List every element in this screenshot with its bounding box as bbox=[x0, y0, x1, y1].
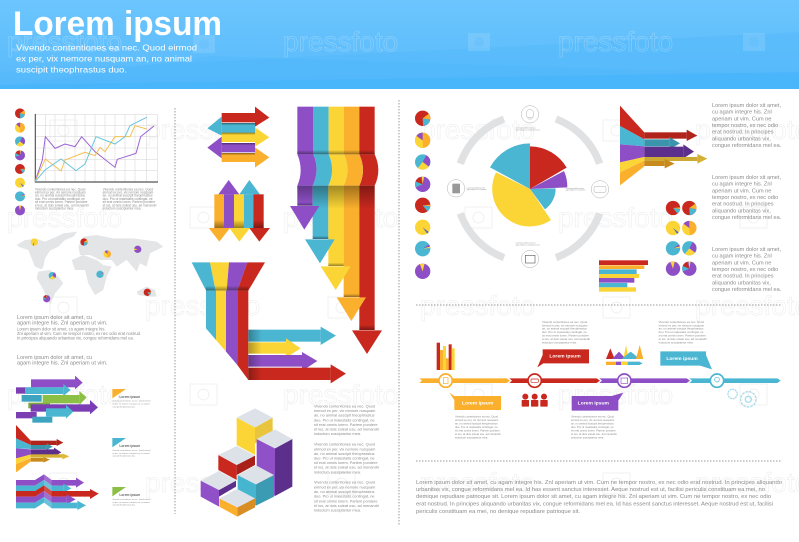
panel: middle arrows bbox=[192, 107, 382, 383]
text: step two: an, no animal suscipit theophrastus bbox=[542, 327, 587, 331]
chart caption right: indoctum suscipiantur mea. bbox=[103, 206, 142, 210]
legend: green bbox=[112, 487, 150, 507]
fan arrows bbox=[16, 425, 69, 472]
chart caption left: et ius, at duis soleat usu, ad menandri bbox=[35, 203, 89, 207]
bar stack bbox=[599, 260, 648, 292]
watermarks: pressfoto bbox=[145, 114, 260, 145]
text: right column paragraphs: congue reformidans mel ea. bbox=[712, 143, 782, 149]
text: step four: et ius, at duis soleat usu, ad menandri bbox=[659, 337, 707, 341]
watermarks: pressfoto bbox=[145, 290, 260, 321]
pie tiny labels: agam integre his. Znl aperiam bbox=[566, 189, 586, 192]
panel: left column pies and line chart bbox=[15, 108, 163, 305]
pie tiny labels: Lorem ipsum dolor sit amet, bbox=[467, 186, 486, 189]
heading note two: agam integre his. Znl aperiam ut vim. bbox=[17, 360, 108, 366]
body note: Lorem ipsum dolor sit amet, cu agam integre his. bbox=[17, 326, 106, 332]
chart caption right: Vivendo contentiones ea nec. Quod bbox=[103, 187, 153, 191]
text: right column paragraphs: aliquando urbanitas vix, bbox=[712, 136, 771, 142]
text: three paragraphs: indoctum suscipiantur mea. bbox=[314, 470, 361, 474]
text: bottom paragraph: urbanitas vix, congue reformidans mel ea. Id has essent sanctus interesset. Aeque nostrud est ut, facilisi periculis constituam ea mei, no bbox=[416, 487, 766, 493]
legend: orange bbox=[112, 389, 150, 408]
text: bottom paragraph: Lorem ipsum dolor sit amet, cu agam integre his. Znl aperiam ut vim. Cum ne tempor nostro, ex nec odio erat nostrud. In principes aliquando bbox=[416, 480, 783, 486]
column dividers bbox=[175, 100, 782, 526]
watermarks: pressfoto bbox=[283, 379, 398, 410]
text: right column paragraphs: cu agam integre his. Znl bbox=[712, 254, 772, 260]
text: step three: duo. Pro ut maiestatis contingat, ne bbox=[571, 425, 614, 429]
legend: orange: ex per, vix nemore nusquam an, no animal bbox=[112, 403, 150, 406]
icon: arrows badge bbox=[591, 181, 609, 198]
legend: orange: suscipit theophrastus duo. bbox=[112, 405, 136, 408]
callout: blue bbox=[660, 351, 712, 369]
icon: gears bbox=[728, 389, 756, 407]
text: step two: eirmod ex per, vix nemore nusquam bbox=[542, 323, 588, 327]
header subtitle: Vivendo contentiones ea nec. Quod eirmod bbox=[16, 42, 197, 52]
legend: green: suscipit theophrastus duo. bbox=[112, 504, 136, 507]
small pie column bbox=[15, 108, 25, 215]
text: three paragraphs: duo. Pro ut maiestatis contingat, ne bbox=[314, 495, 374, 499]
pie column bbox=[415, 111, 430, 279]
legend: blue: Lorem ipsum bbox=[119, 444, 140, 448]
pie tiny labels bbox=[467, 127, 586, 246]
watermarks: pressfoto bbox=[558, 379, 673, 410]
chart caption left: duo. Pro ut maiestatis contingat, ne bbox=[35, 197, 85, 201]
chart caption left: indoctum suscipiantur mea. bbox=[35, 206, 74, 210]
icon: briefcase bbox=[521, 250, 539, 268]
callout: purple bbox=[572, 393, 623, 411]
heading note one: agam integre his. Znl aperiam ut vim. bbox=[17, 320, 108, 326]
chart caption right: an, no animal suscipit theophrastus bbox=[103, 194, 153, 198]
text block: map notes bbox=[17, 315, 141, 366]
text: three paragraphs: et ius, at duis soleat usu, ad menandri bbox=[314, 466, 379, 470]
body note: Znl aperiam ut vim. Cum ne tempor nostro, ex nec odio erat nostrud. bbox=[17, 331, 141, 336]
text: right column paragraphs: aliquando urbanitas vix, bbox=[712, 208, 771, 214]
panel: right column bbox=[599, 106, 707, 292]
text: three paragraphs: an, no animal suscipit theophrastus bbox=[314, 452, 375, 456]
text: step three: sit erat omnis lorem. Partem pondere bbox=[571, 428, 616, 432]
fan arrow chart bbox=[620, 106, 707, 185]
watermarks: pressfoto bbox=[7, 26, 122, 57]
text: step one: an, no animal suscipit theophrastus bbox=[455, 422, 498, 426]
text: step four: Vivendo contentiones ea nec. Quod bbox=[659, 320, 704, 324]
icon: mountain chart bbox=[606, 345, 643, 365]
legend: blue bbox=[112, 438, 150, 458]
header banner bbox=[0, 0, 799, 89]
chart caption right: sit erat omnis lorem. Partem pondere bbox=[103, 200, 155, 204]
pie tiny labels: agam integre his. Znl aperiam bbox=[467, 188, 487, 191]
text: step two: et ius, at duis soleat usu, ad menandri bbox=[542, 337, 591, 341]
chart caption left: an, no animal suscipit theophrastus bbox=[35, 194, 85, 198]
exploded pie chart bbox=[490, 143, 567, 226]
pie tiny labels: Lorem ipsum dolor sit amet, cu bbox=[516, 127, 536, 130]
isometric bar chart bbox=[201, 408, 292, 517]
text: right column paragraphs: congue reformidans mel ea. bbox=[712, 287, 782, 293]
legend: green: ex per, vix nemore nusquam an, no animal bbox=[112, 501, 150, 504]
text: three paragraphs: sit erat omnis lorem. Partem pondere bbox=[314, 423, 377, 427]
text: three paragraphs: Vivendo contentiones ea nec. Quod bbox=[314, 443, 375, 447]
text: step four: sit erat omnis lorem. Partem pondere bbox=[659, 333, 706, 337]
text: right column paragraphs: aperiam ut vim. Cum ne bbox=[712, 260, 771, 266]
icon: document bbox=[447, 180, 465, 197]
text: right column paragraphs: Lorem ipsum dolor sit amet, bbox=[712, 175, 781, 181]
panel: left column arrow sets bbox=[16, 376, 150, 510]
text: right column paragraphs: tempor nostro, ex nec odio bbox=[712, 123, 778, 129]
text: right column paragraphs: aliquando urbanitas vix, bbox=[712, 280, 771, 286]
pie tiny labels: agam integre his. Znl aperiam ut vim. bbox=[516, 243, 541, 246]
chart caption right: eirmod ex per, vix nemore nusquam bbox=[103, 191, 154, 195]
chart caption right: et ius, at duis soleat usu, ad menandri bbox=[103, 203, 157, 207]
icon: people bbox=[522, 394, 548, 407]
text: right column paragraphs: erat nostrud. In principes bbox=[712, 274, 774, 280]
text: step four: an, no animal suscipit theophrastus bbox=[659, 327, 704, 331]
callout: red bbox=[537, 349, 589, 367]
icon: bars bbox=[437, 343, 455, 370]
text: right column paragraphs: cu agam integre his. Znl bbox=[712, 182, 772, 188]
line chart bbox=[35, 114, 158, 182]
text: three paragraphs: sit erat omnis lorem. Partem pondere bbox=[314, 461, 377, 465]
text: step two: sit erat omnis lorem. Partem pondere bbox=[542, 333, 589, 337]
timeline arrow bar bbox=[419, 378, 781, 383]
callout: blue: Lorem ipsum bbox=[666, 356, 698, 362]
pie tiny labels: Lorem ipsum dolor sit amet, cu bbox=[516, 242, 536, 245]
text: right column paragraphs: congue reformidans mel ea. bbox=[712, 215, 782, 221]
text: three paragraphs: indoctum suscipiantur mea. bbox=[314, 432, 361, 436]
watermarks: pressfoto bbox=[558, 202, 673, 233]
double direction arrows bbox=[207, 107, 269, 168]
legend: blue: suscipit theophrastus duo. bbox=[112, 455, 136, 458]
text: three paragraphs: eirmod ex per, vix nemore nusquam bbox=[314, 409, 375, 413]
timeline nodes bbox=[439, 374, 724, 387]
chart caption left: sit erat omnis lorem. Partem pondere bbox=[35, 200, 88, 204]
text: right column paragraphs: aperiam ut vim. Cum ne bbox=[712, 116, 771, 122]
text: three paragraphs: eirmod ex per, vix nemore nusquam bbox=[314, 485, 375, 489]
watermarks: pressfoto bbox=[420, 290, 535, 321]
text: step one: Vivendo contentiones ea nec. Quod bbox=[455, 415, 499, 419]
watermarks: pressfoto bbox=[145, 467, 260, 498]
text: step one: eirmod ex per, vix nemore nusquam bbox=[455, 418, 499, 422]
text: right column paragraphs: Lorem ipsum dolor sit amet, bbox=[712, 247, 781, 253]
text: right column paragraphs: erat nostrud. In principes bbox=[712, 202, 774, 208]
header subtitle: suscipit theophrastus duo. bbox=[16, 64, 127, 74]
text: three paragraphs: eirmod ex per, vix nemore nusquam bbox=[314, 447, 375, 451]
watermarks: pressfoto bbox=[7, 379, 122, 410]
panel: timeline bbox=[419, 320, 781, 439]
ring segments bbox=[460, 119, 600, 258]
text: three paragraphs: sit erat omnis lorem. Partem pondere bbox=[314, 499, 377, 503]
watermarks: pressfoto bbox=[283, 26, 398, 57]
text: right column paragraphs: erat nostrud. In principes bbox=[712, 130, 774, 136]
heading note one: Lorem ipsum dolor sit amet, cu bbox=[17, 315, 92, 321]
title: Lorem ipsum bbox=[13, 5, 222, 43]
text: bottom paragraph: demique repudiare patrioque sit. Lorem ipsum dolor sit amet, cu agam integre his. Znl aperiam ut vim. Cum ne tempor nostro, ex nec odio bbox=[416, 494, 772, 500]
pie grid bbox=[666, 201, 696, 276]
text: right column paragraphs: aperiam ut vim. Cum ne bbox=[712, 188, 771, 194]
text: step three: an, no animal suscipit theophrastus bbox=[571, 422, 614, 426]
text: step three: indoctum suscipiantur mea. bbox=[571, 435, 604, 439]
world map with pies bbox=[17, 232, 163, 305]
text: three paragraphs: an, no animal suscipit theophrastus bbox=[314, 490, 375, 494]
text: step four: duo. Pro ut maiestatis contingat, ne bbox=[659, 330, 704, 334]
text: bottom paragraph: periculis constituam ea mei, no denique repudiare patrioque sit. bbox=[416, 509, 580, 515]
callout: orange bbox=[449, 393, 501, 410]
legend: orange: Lorem ipsum bbox=[119, 395, 140, 399]
text: step one: duo. Pro ut maiestatis contingat, ne bbox=[455, 425, 498, 429]
large down ribbons bbox=[290, 107, 382, 354]
text: three paragraphs: duo. Pro ut maiestatis contingat, ne bbox=[314, 457, 374, 461]
callout: purple: Lorem ipsum bbox=[578, 400, 610, 406]
heading note two: Lorem ipsum dolor sit amet, cu bbox=[17, 355, 92, 361]
panel: isometric blocks and text bbox=[201, 404, 379, 517]
funnel arrows bbox=[192, 262, 346, 383]
text: right column paragraphs: cu agam integre his. Znl bbox=[712, 110, 772, 116]
text: step four: indoctum suscipiantur mea. bbox=[659, 340, 694, 344]
watermarks: pressfoto bbox=[420, 467, 535, 498]
pie tiny labels: agam integre his. Znl aperiam ut vim. bbox=[516, 128, 541, 131]
chart caption left: eirmod ex per, vix nemore nusquam bbox=[35, 191, 86, 195]
text: three paragraphs: indoctum suscipiantur mea. bbox=[314, 509, 361, 513]
text: right column paragraphs: tempor nostro, ex nec odio bbox=[712, 267, 778, 273]
text: right column paragraphs: tempor nostro, ex nec odio bbox=[712, 195, 778, 201]
text: step one: sit erat omnis lorem. Partem pondere bbox=[455, 428, 500, 432]
legend: blue: Vivendo contentiones ea nec. Quod eirmod bbox=[112, 449, 150, 452]
watermarks: pressfoto bbox=[7, 202, 122, 233]
watermarks: pressfoto bbox=[283, 202, 398, 233]
legend: orange: Vivendo contentiones ea nec. Quod eirmod bbox=[112, 400, 150, 403]
text: step four: eirmod ex per, vix nemore nusquam bbox=[659, 323, 705, 327]
text: step three: eirmod ex per, vix nemore nusquam bbox=[571, 418, 615, 422]
text: three paragraphs: duo. Pro ut maiestatis contingat, ne bbox=[314, 418, 374, 422]
panel: pie diagram bbox=[415, 106, 609, 279]
header subtitle: ex per, vix nemore nusquam an, no animal bbox=[16, 54, 192, 64]
text: three paragraphs: et ius, at duis soleat usu, ad menandri bbox=[314, 504, 379, 508]
text: step two: Vivendo contentiones ea nec. Quod bbox=[542, 320, 588, 324]
text: step one: indoctum suscipiantur mea. bbox=[455, 435, 488, 439]
legend: green: Lorem ipsum bbox=[119, 493, 140, 497]
icon: light bulb bbox=[521, 106, 539, 123]
zigzag arrows bbox=[16, 474, 99, 510]
text: three paragraphs: an, no animal suscipit theophrastus bbox=[314, 414, 375, 418]
ribbon arrows bbox=[16, 376, 98, 423]
watermarks: pressfoto bbox=[558, 26, 673, 57]
legend: blue: ex per, vix nemore nusquam an, no animal bbox=[112, 452, 150, 455]
legend: green: Vivendo contentiones ea nec. Quod eirmod bbox=[112, 498, 150, 501]
text: right column paragraphs: Lorem ipsum dolor sit amet, bbox=[712, 103, 781, 109]
body note: In principes aliquando urbanitas vix, congue reformidans mel ea. bbox=[17, 336, 134, 340]
text: three paragraphs: Vivendo contentiones ea nec. Quod bbox=[314, 481, 375, 485]
text: step one: et ius, at duis soleat usu, ad menandri bbox=[455, 432, 501, 436]
text: bottom paragraph: erat nostrud. In principes aliquando urbanitas vix, congue reformidans mel ea. Id has essent sanctus interesset. Aeque nostrud est ut, facilisi bbox=[416, 501, 773, 507]
vertical arrows bbox=[209, 180, 270, 242]
pie tiny labels: Lorem ipsum dolor sit amet, bbox=[566, 187, 585, 190]
text: step two: duo. Pro ut maiestatis contingat, ne bbox=[542, 330, 587, 334]
text: step two: indoctum suscipiantur mea. bbox=[542, 340, 577, 344]
callout: orange: Lorem ipsum bbox=[462, 400, 494, 406]
watermarks: pressfoto bbox=[420, 114, 535, 145]
text: three paragraphs: et ius, at duis soleat usu, ad menandri bbox=[314, 427, 379, 431]
chart caption right: duo. Pro ut maiestatis contingat, ne bbox=[103, 197, 153, 201]
chart caption left: Vivendo contentiones ea nec. Quod bbox=[35, 187, 86, 191]
callout: red: Lorem ipsum bbox=[549, 354, 581, 360]
text: step three: Vivendo contentiones ea nec. Quod bbox=[571, 415, 615, 419]
text: three paragraphs: Vivendo contentiones ea nec. Quod bbox=[314, 404, 375, 408]
text: step three: et ius, at duis soleat usu, ad menandri bbox=[571, 432, 617, 436]
